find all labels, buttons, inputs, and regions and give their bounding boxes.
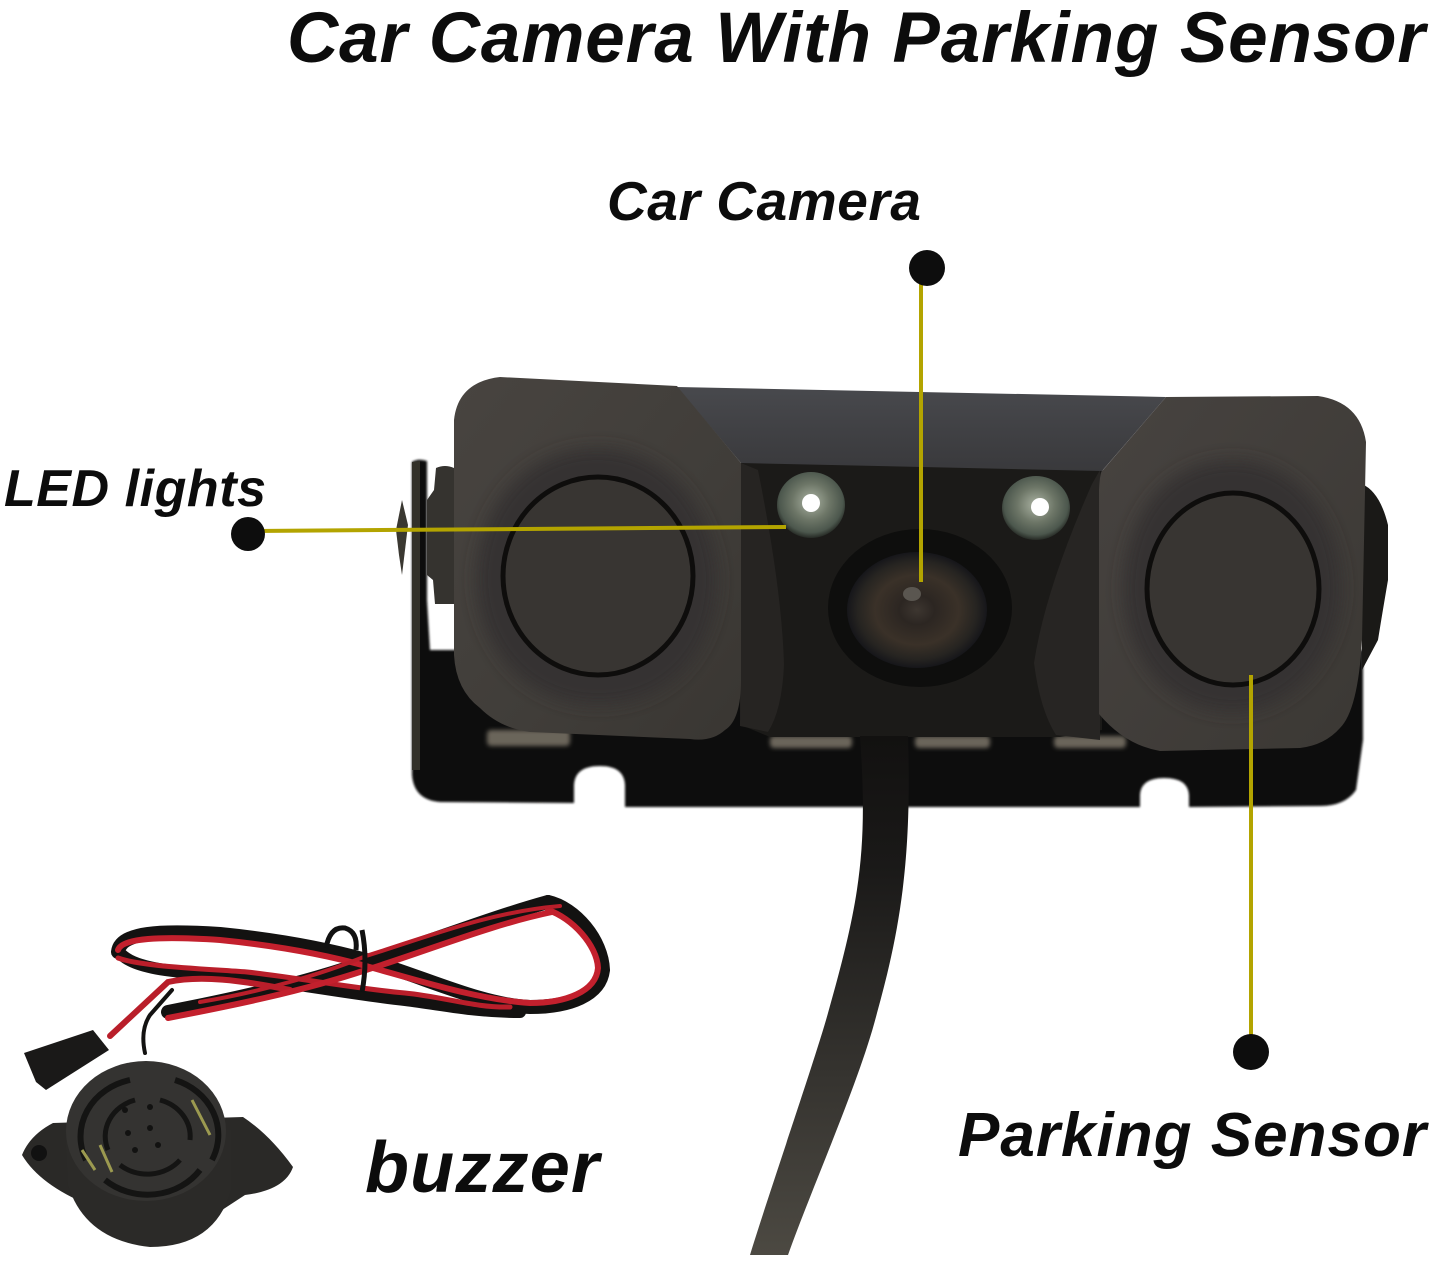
screw: [396, 500, 408, 575]
glossy side strips: [740, 463, 784, 732]
right sensor pad: [1099, 396, 1366, 751]
wires: [110, 902, 603, 1053]
callout: LED lights: LED lights: [4, 460, 266, 518]
camera assembly: [396, 377, 1388, 807]
tan bumps under the body: [487, 730, 1126, 748]
left LED: [777, 472, 845, 538]
callout: LED lights: [4, 460, 786, 551]
buzzer body: [65, 1130, 231, 1247]
left sensor pad: [454, 377, 741, 740]
buzzer top face: [66, 1061, 226, 1201]
callout: Car Camera: Car Camera: [607, 170, 921, 232]
connector: [24, 1030, 109, 1090]
callout: Parking Sensor: [958, 675, 1429, 1170]
left mount block: [427, 466, 454, 604]
lens: [828, 529, 1012, 687]
callout: Car Camera: [607, 170, 945, 582]
camera body centre: [741, 462, 1102, 737]
cable tie: [326, 928, 365, 992]
buzzer with wires: [22, 902, 603, 1247]
right LED: [1002, 476, 1070, 540]
buzzer label: buzzer: [365, 1128, 603, 1208]
buzzer base: [22, 1117, 293, 1212]
mounting bracket: [396, 460, 1388, 807]
right sensor disc: [1147, 493, 1319, 685]
title: Car Camera With Parking Sensor: [287, 0, 1428, 78]
left sensor disc: [503, 477, 693, 675]
callout: Parking Sensor: Parking Sensor: [958, 1101, 1429, 1170]
cable: [750, 736, 909, 1255]
top wedge: [677, 387, 1166, 471]
right mount: [1362, 484, 1388, 670]
